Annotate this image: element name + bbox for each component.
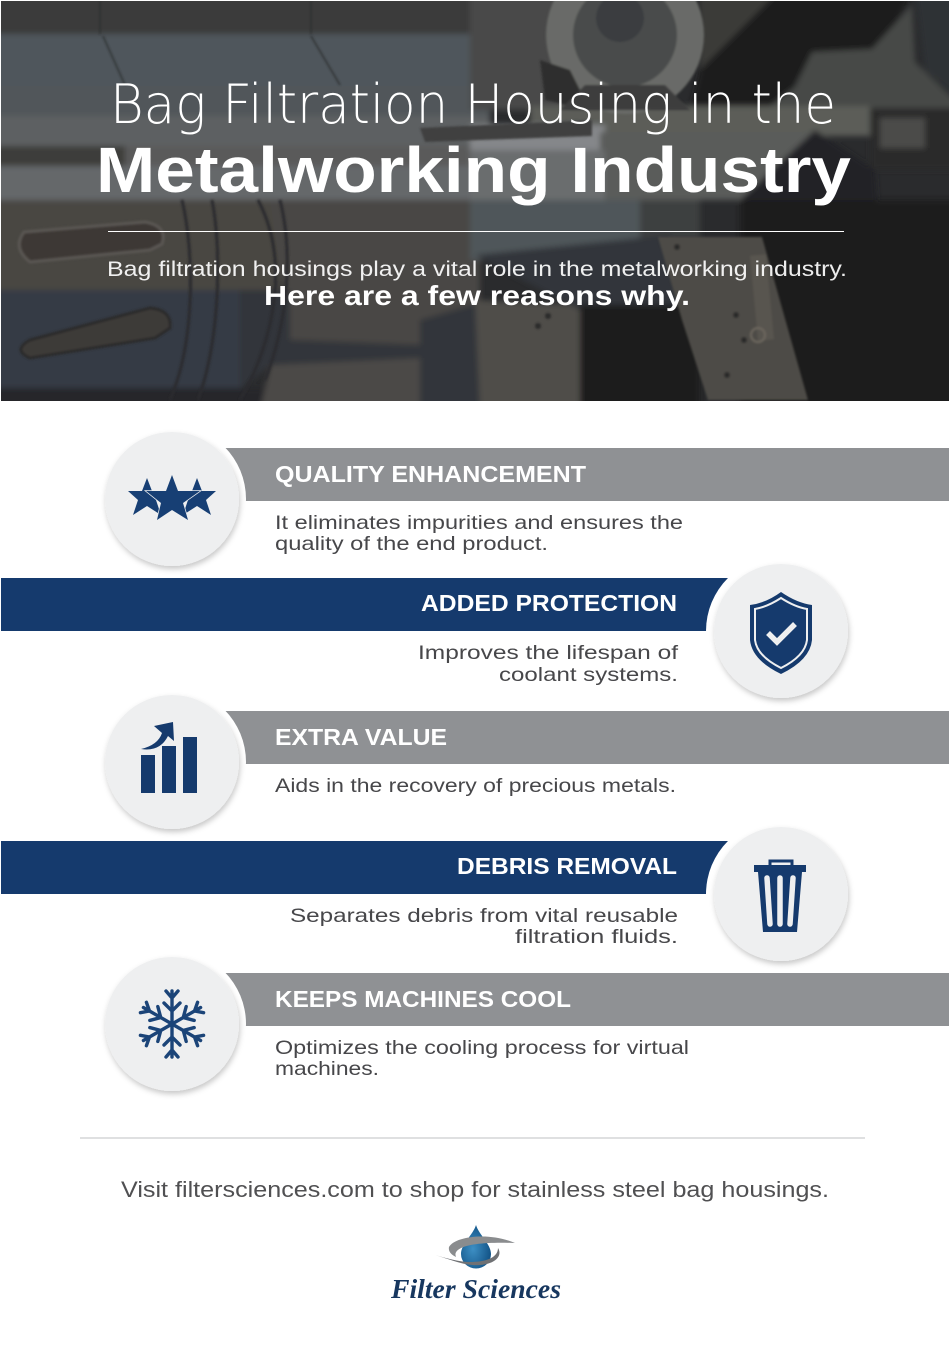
icon: white ring cutout <box>98 688 246 836</box>
bottom right <box>470 200 640 260</box>
body: keeps machines cool: Optimizes the cooling process for virtual <box>275 1037 689 1059</box>
icon: white ring cutout <box>98 425 246 573</box>
panel: keeps machines cool <box>98 950 949 1098</box>
icon: white ring cutout <box>98 950 246 1098</box>
heading: quality enhancement: QUALITY ENHANCEMENT <box>275 461 586 487</box>
heading: debris removal: DEBRIS REMOVAL <box>457 853 677 879</box>
icon: white ring cutout <box>706 556 856 706</box>
icon: bar chart with arrow <box>141 722 197 793</box>
title: Metalworking Industry <box>96 134 851 206</box>
seams <box>100 0 340 85</box>
intro text: Here are a few reasons why. <box>264 280 690 311</box>
logo icon: water drop with swoosh <box>435 1225 515 1268</box>
perforated block <box>420 120 592 142</box>
panel: quality enhancement <box>98 425 949 573</box>
body: quality enhancement: It eliminates impurities and ensures the <box>275 512 683 534</box>
body: added protection <box>418 642 679 686</box>
panel: extra value <box>98 688 949 836</box>
flange <box>546 0 704 114</box>
divider line <box>108 231 844 232</box>
icon: circle badge <box>714 564 848 698</box>
footer call to action: Visit filtersciences.com to shop for stainless steel bag housings. <box>121 1177 829 1202</box>
body: added protection: Improves the lifespan of <box>418 642 679 664</box>
body: debris removal: Separates debris from vital reusable <box>290 905 678 927</box>
icon: trash can <box>754 861 806 932</box>
hero photo background: machine shaft <box>0 0 950 410</box>
icon: three stars <box>128 475 216 520</box>
banner: debris removal <box>1 841 731 894</box>
icon: shield with check <box>750 592 812 674</box>
heading: keeps machines cool: KEEPS MACHINES COOL <box>275 986 571 1012</box>
icon: snowflake <box>139 991 205 1057</box>
ring grooves <box>170 200 287 400</box>
icon: circle badge <box>105 957 239 1091</box>
body: quality enhancement: quality of the end product. <box>275 533 548 555</box>
footer divider <box>80 1137 865 1139</box>
top right <box>470 0 570 110</box>
body: keeps machines cool <box>275 1037 689 1080</box>
icon: circle badge <box>105 432 239 566</box>
intro text <box>107 258 847 311</box>
banner: added protection <box>1 578 731 631</box>
body: quality enhancement <box>275 512 683 555</box>
title <box>96 73 851 206</box>
panel: added protection <box>1 556 856 706</box>
banner: extra value <box>225 711 949 764</box>
banner: quality enhancement <box>225 448 949 501</box>
banner: keeps machines cool <box>225 973 949 1026</box>
body: debris removal <box>290 905 678 948</box>
body: added protection: coolant systems. <box>499 664 678 686</box>
title: Bag Filtration Housing in the <box>110 73 836 136</box>
body: keeps machines cool: machines. <box>275 1058 379 1080</box>
heading: extra value: EXTRA VALUE <box>275 724 447 750</box>
heading: added protection: ADDED PROTECTION <box>421 590 677 616</box>
body: extra value: Aids in the recovery of precious metals. <box>275 775 676 797</box>
icon: white ring cutout <box>706 819 856 969</box>
logo: Filter Sciences <box>390 1225 561 1304</box>
icon: circle badge <box>105 695 239 829</box>
logo wordmark: Filter Sciences <box>390 1274 561 1304</box>
body: debris removal: filtration fluids. <box>515 926 678 948</box>
icon: circle badge <box>714 827 848 961</box>
intro text: Bag filtration housings play a vital role in the metalworking industry. <box>107 258 847 281</box>
panel: debris removal <box>1 819 856 969</box>
plate: mounting bar <box>658 237 808 400</box>
slots <box>19 222 163 262</box>
